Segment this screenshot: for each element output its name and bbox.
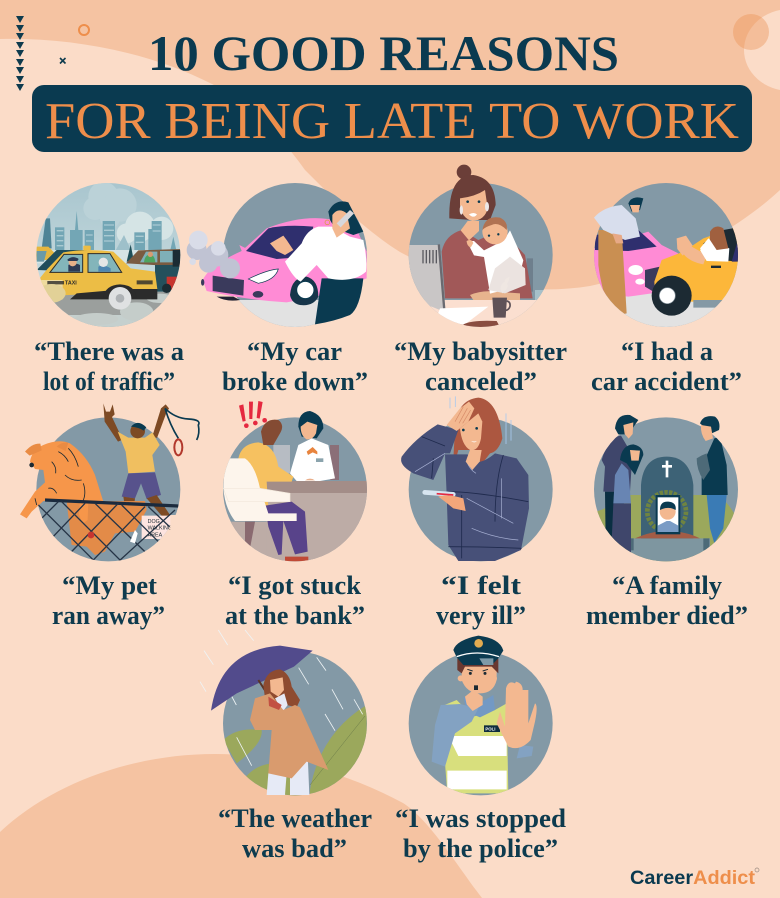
dog upper	[20, 441, 103, 518]
man right	[707, 495, 727, 543]
police cap	[453, 636, 503, 665]
panel: car accident	[591, 183, 742, 396]
police tag	[484, 725, 500, 732]
man	[103, 403, 123, 442]
smoke	[187, 240, 240, 278]
woman	[315, 278, 363, 324]
banker	[330, 445, 339, 480]
fence	[45, 500, 178, 506]
hair	[263, 669, 300, 707]
panel: stuck at the bank	[223, 401, 368, 630]
caption	[34, 337, 184, 396]
caption: “My babysitter	[394, 337, 567, 366]
wreath	[647, 492, 686, 531]
caption: by the police”	[403, 834, 558, 863]
left car	[35, 247, 55, 260]
illustration: broken car and woman on phone	[187, 183, 370, 332]
decorative triangle column	[16, 16, 24, 91]
caption: “There was a	[34, 337, 184, 366]
illustration: mother holding baby at desk	[408, 165, 555, 332]
caption: very ill”	[436, 601, 526, 630]
caption: member died”	[586, 601, 748, 630]
caption: broke down”	[222, 367, 368, 396]
hand with thermometer	[438, 495, 466, 511]
illustration: two cars colliding	[594, 183, 742, 332]
leash	[165, 408, 199, 440]
caption: canceled”	[425, 367, 537, 396]
caption: “I had a	[621, 337, 713, 366]
stop hand	[497, 682, 537, 748]
title: 10 GOOD REASONS	[148, 25, 619, 81]
sign	[142, 516, 170, 539]
illustration: mourners at grave	[594, 415, 742, 562]
illustration: taxi in traffic	[33, 182, 183, 332]
caption: “I was stopped	[395, 804, 567, 833]
caption: “My car	[247, 337, 342, 366]
caption: at the bank”	[225, 601, 365, 630]
caption	[52, 571, 165, 630]
caption: car accident”	[591, 367, 742, 396]
panel: babysitter canceled	[394, 165, 567, 396]
caption: “I got stuck	[228, 571, 362, 600]
teal car	[155, 265, 180, 292]
caption	[586, 571, 748, 630]
dog walking area sign	[148, 519, 172, 538]
dog lower	[67, 501, 147, 555]
baby	[467, 230, 523, 294]
caption	[225, 571, 365, 630]
yellow car	[654, 228, 738, 302]
caption	[222, 337, 368, 396]
portrait	[656, 495, 680, 534]
woman	[612, 503, 631, 555]
illustration: woman with umbrella in rain	[200, 630, 367, 797]
caption	[436, 571, 526, 630]
vest	[441, 700, 508, 793]
caption	[394, 337, 567, 396]
illustration: dog jumping fence	[20, 403, 199, 562]
caption: “I felt	[441, 571, 521, 600]
decorative ring	[79, 25, 89, 35]
hair, head	[457, 165, 471, 179]
driver	[677, 236, 693, 256]
illustration: sick woman with thermometer	[401, 396, 553, 561]
man	[594, 205, 640, 240]
caption: ran away”	[52, 601, 165, 630]
rain	[200, 630, 363, 766]
subtitle banner: FOR BEING LATE TO WORK	[45, 93, 739, 150]
customer	[238, 442, 293, 508]
coffee mug	[492, 277, 510, 318]
sweater	[401, 424, 458, 480]
hair	[453, 398, 502, 472]
trousers	[267, 730, 309, 795]
illustration: taxi in traffic: TAXI	[65, 280, 77, 286]
man left	[605, 492, 624, 545]
brown car	[126, 249, 180, 267]
face	[460, 413, 482, 450]
panel: traffic	[33, 182, 184, 396]
man trousers	[598, 230, 627, 317]
caption: “My pet	[62, 571, 157, 600]
panel: pet ran away	[20, 403, 199, 630]
caption: “The weather	[218, 804, 372, 833]
logo: CareerAddict: CareerAddict	[630, 868, 756, 889]
panel: family member died	[586, 415, 748, 630]
caption	[218, 804, 372, 863]
caption: “A family	[612, 571, 722, 600]
caption	[395, 804, 567, 863]
panel: felt very ill	[401, 396, 553, 630]
dog walking area sign: DOG	[148, 519, 160, 525]
dog walking area sign: WALKING	[148, 526, 172, 532]
chair	[245, 522, 255, 548]
hand	[465, 690, 483, 711]
dog walking area sign: AREA	[148, 532, 163, 538]
taxi	[38, 250, 157, 297]
car	[203, 218, 367, 302]
panel: bad weather	[200, 630, 372, 863]
coat	[250, 693, 328, 778]
exclamation marks	[239, 401, 267, 428]
panel: stopped by the police	[395, 636, 567, 863]
hand on forehead	[447, 402, 474, 431]
cross	[662, 461, 672, 477]
head	[462, 660, 497, 693]
caption: was bad”	[242, 834, 347, 863]
thermometer	[422, 490, 456, 497]
umbrella	[211, 646, 313, 711]
decorative cross	[60, 58, 66, 64]
illustration: police officer	[409, 636, 553, 795]
caption: lot of traffic”	[43, 367, 175, 396]
left arm	[432, 704, 478, 767]
caption	[591, 337, 742, 396]
panel: car broke down	[187, 183, 370, 396]
illustration: police officer: POLI	[485, 726, 495, 731]
sweat lines	[450, 396, 511, 444]
illustration: customer at bank desk	[223, 401, 368, 562]
